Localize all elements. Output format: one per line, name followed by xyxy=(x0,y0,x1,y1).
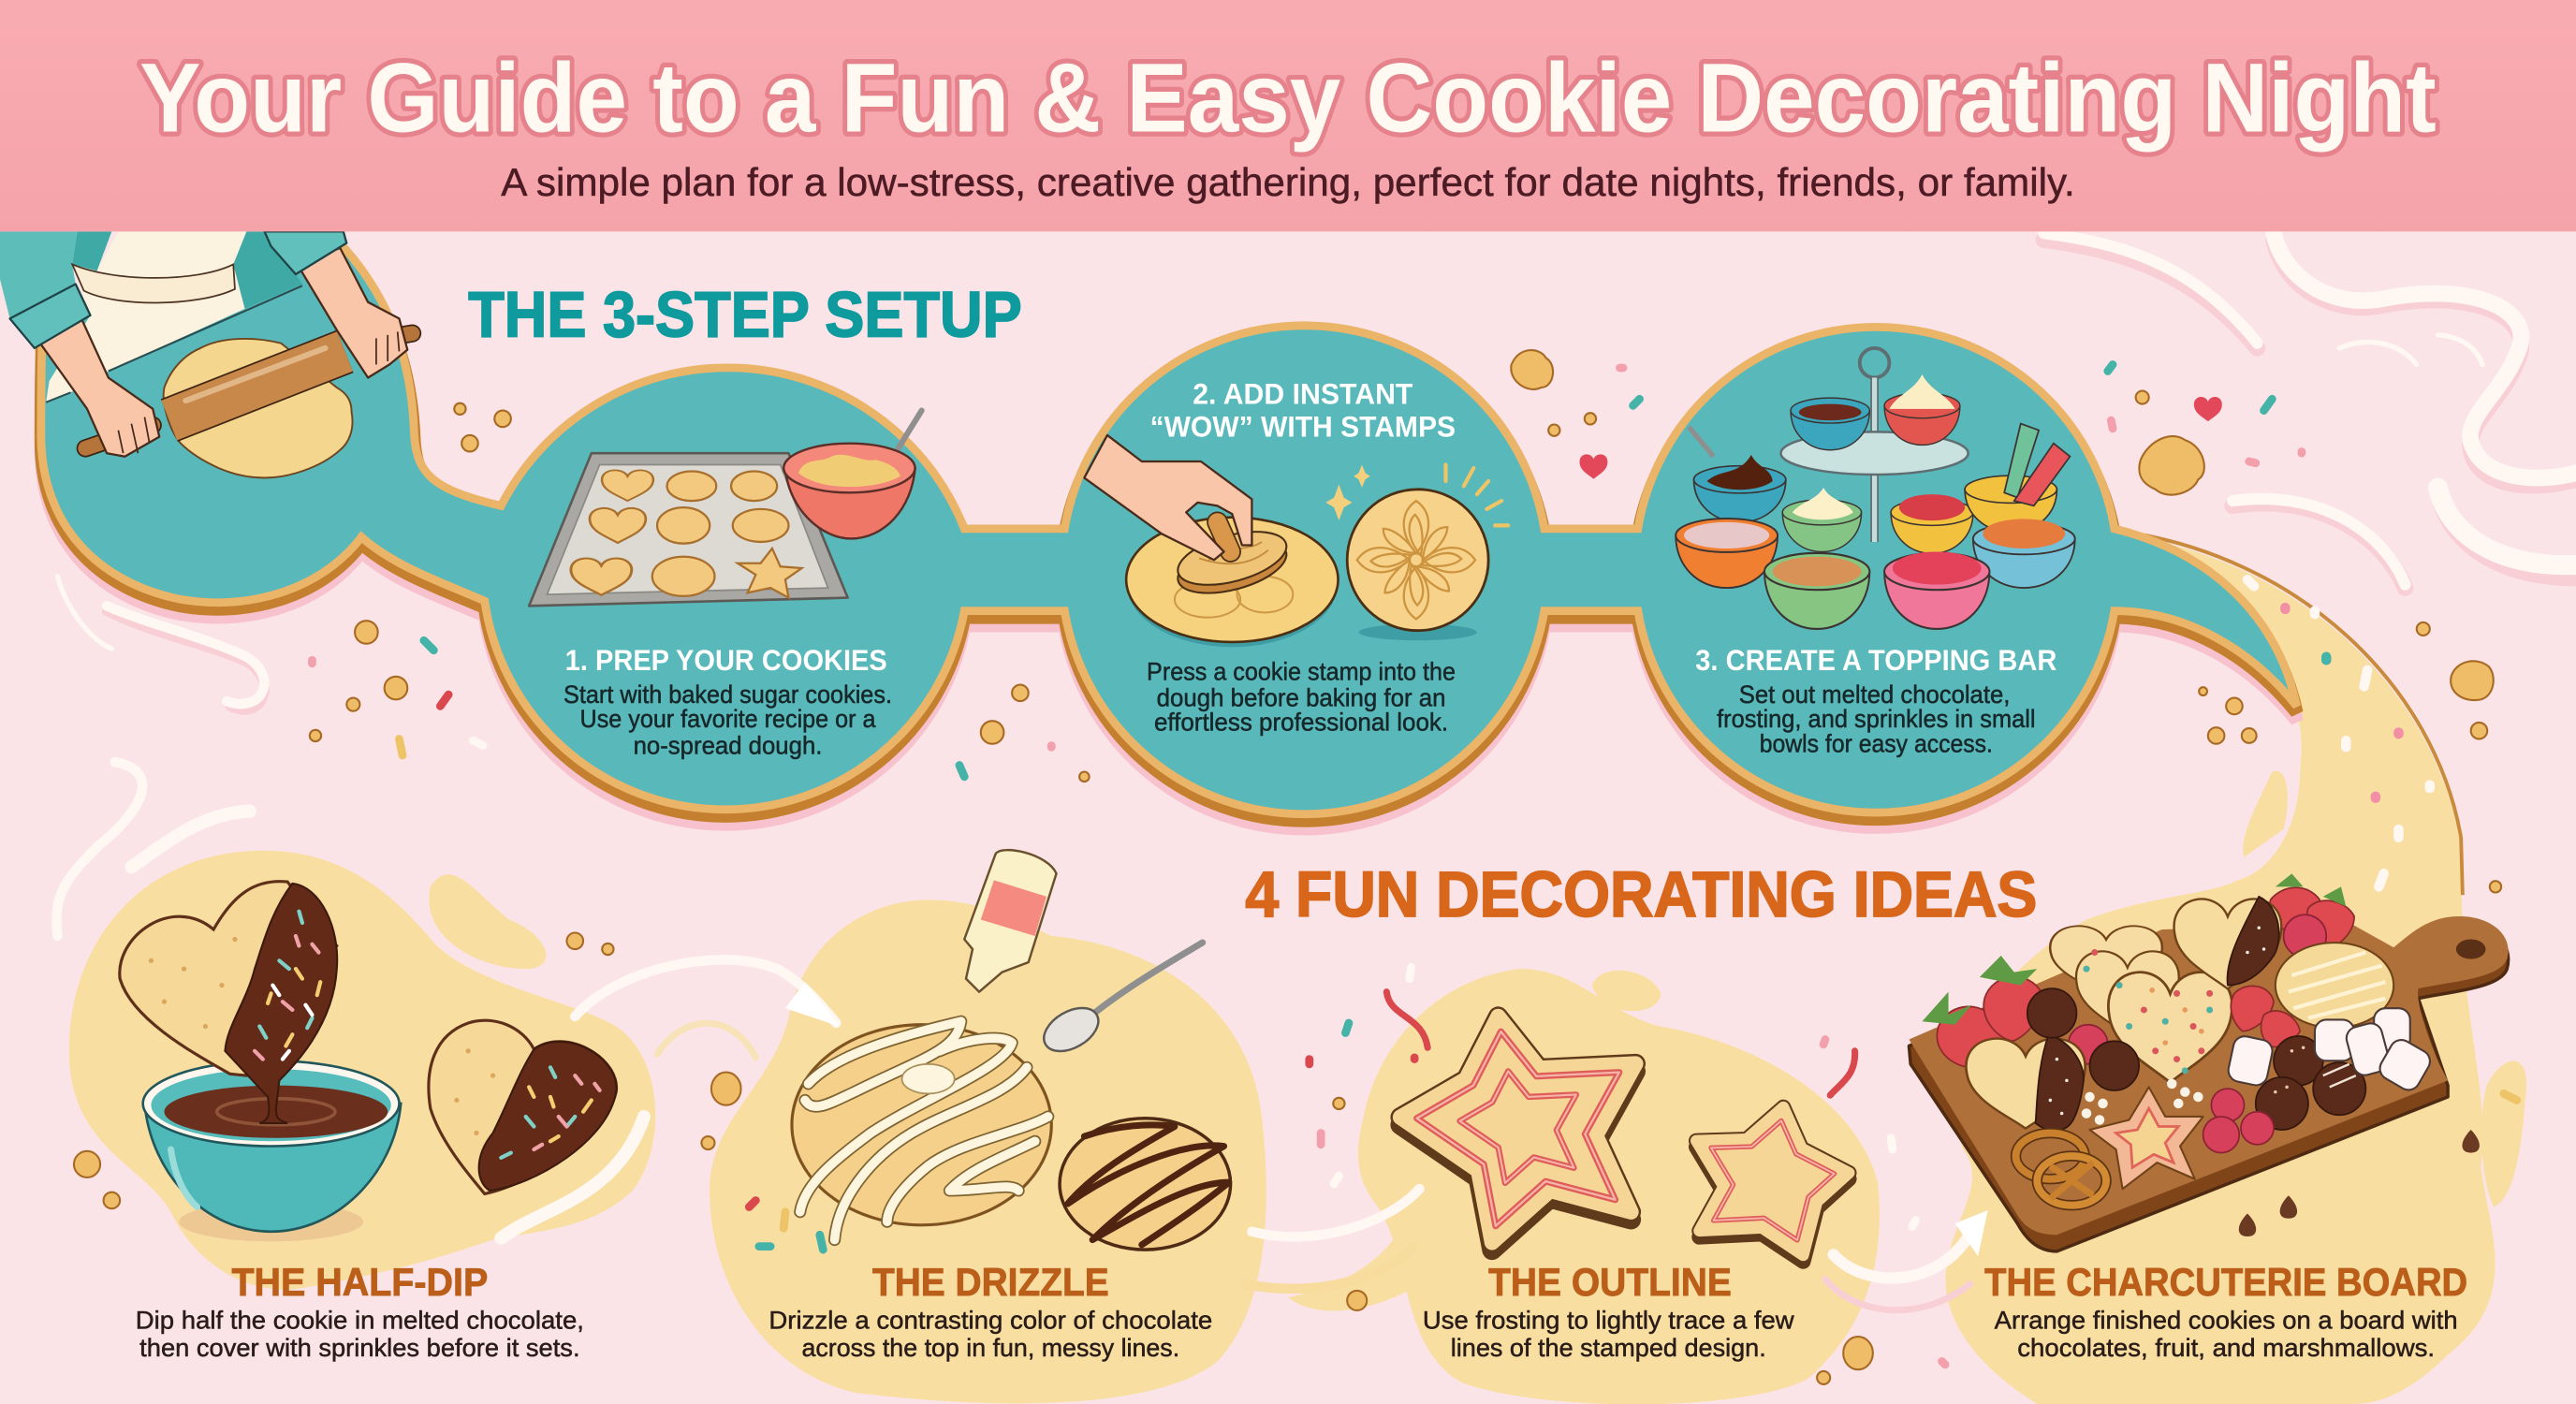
scattered crumbs xyxy=(74,350,2501,1384)
apron waist band xyxy=(72,264,235,302)
half-dipped hearts xyxy=(1966,897,2281,1131)
icon: sparkles xyxy=(1325,464,1508,525)
text: step 3: Set out melted chocolate, xyxy=(1739,680,2010,709)
white curved arrow: outline to charcuterie xyxy=(1825,1210,1988,1310)
panel: step 3 xyxy=(1676,348,2075,758)
right arm xyxy=(298,248,407,378)
subtitle: A simple plan for a low-stress, creative gathering, perfect for date nights, friends, or family. xyxy=(501,160,2075,204)
white curved arrow: drizzle to outline xyxy=(1245,1189,1419,1289)
text: outline: lines of the stamped design. xyxy=(1451,1333,1766,1362)
right sleeve xyxy=(265,231,346,274)
strawberries: small pair xyxy=(2231,986,2300,1047)
sprinkle heart cookies xyxy=(2050,926,2232,1082)
band shadow xyxy=(41,246,2297,829)
text: charcuterie: Arrange finished cookies on a board with xyxy=(1995,1305,2458,1334)
scattered sprinkles xyxy=(312,364,2517,1365)
raspberry xyxy=(2069,914,2326,1064)
stream sprinkles xyxy=(2247,579,2430,886)
heading: step 1: 1. PREP YOUR COOKIES xyxy=(565,643,887,677)
illustration: dipped heart cookie xyxy=(120,882,337,1123)
cream cookie stream xyxy=(1945,534,2496,1404)
header band xyxy=(0,0,2576,231)
left arm xyxy=(37,320,159,457)
heading: step 2: 2. ADD INSTANT xyxy=(1193,377,1412,411)
illustration: icing bottle xyxy=(964,850,1057,992)
heading: step 3: 3. CREATE A TOPPING BAR xyxy=(1695,643,2057,677)
marshmallows xyxy=(2226,1008,2434,1094)
illustration: small star cookie xyxy=(1696,1107,1849,1262)
chocolate chips xyxy=(2239,1130,2480,1236)
text: half-dip xyxy=(136,1305,584,1362)
cream tail into outline blob xyxy=(1288,971,1661,1310)
cream blob: half-dip xyxy=(69,851,655,1290)
text: drizzle xyxy=(768,1305,1212,1362)
text: step 3: bowls for easy access. xyxy=(1760,729,1993,758)
illustration: tiered stand xyxy=(1781,348,1969,542)
panel: the drizzle xyxy=(768,850,1231,1362)
illustration: rolling dough xyxy=(0,231,413,478)
text: outline xyxy=(1423,1305,1794,1362)
white icing drip by half-dip cookie xyxy=(501,1117,644,1238)
icons: hearts xyxy=(1579,397,2222,479)
heading: half-dip: THE HALF-DIP xyxy=(231,1260,488,1304)
text: step 3 xyxy=(1717,680,2036,758)
illustration: chocolate bowl xyxy=(143,1060,401,1241)
shirt side panels xyxy=(72,231,302,309)
tray cookies xyxy=(571,470,801,598)
shirt xyxy=(0,231,77,318)
sprinkles xyxy=(255,912,320,1060)
text: half-dip: Dip half the cookie in melted chocolate, xyxy=(136,1305,584,1334)
title: Your Guide to a Fun & Easy Cookie Decorating Night xyxy=(139,43,2437,153)
stream inner streak xyxy=(2243,771,2288,857)
illustration: dough and stamp xyxy=(1084,435,1339,647)
heading: 4 fun decorating ideas: 4 FUN DECORATING IDEAS xyxy=(1245,858,2037,930)
panel: the half-dip xyxy=(120,882,616,1362)
pretzels xyxy=(2016,1133,2106,1206)
dough xyxy=(164,339,353,478)
drizzled cookie xyxy=(2276,943,2393,1028)
heading: outline: THE OUTLINE xyxy=(1488,1260,1732,1304)
table edge xyxy=(46,285,302,402)
text: charcuterie: chocolates, fruit, and marshmallows. xyxy=(2017,1333,2435,1362)
illustration: topping bowls xyxy=(1676,374,2075,629)
illustration: dough bowl xyxy=(783,411,922,538)
cream blob: drizzle xyxy=(710,899,1266,1403)
panel: the outline xyxy=(1386,992,1855,1362)
text: step 1: Use your favorite recipe or a xyxy=(580,704,876,733)
icing swirls: left xyxy=(56,577,264,936)
star cookie xyxy=(2089,1087,2203,1189)
text: half-dip: then cover with sprinkles before it sets. xyxy=(139,1333,580,1362)
text: step 1 xyxy=(564,680,892,759)
heading: drizzle: THE DRIZZLE xyxy=(872,1260,1109,1304)
raspberries xyxy=(2203,1089,2274,1153)
text: step 2: effortless professional look. xyxy=(1154,708,1448,737)
panel: the charcuterie board xyxy=(1909,873,2509,1362)
illustration: wooden board xyxy=(1909,916,2509,1251)
illustration: white drizzle cookie xyxy=(792,1021,1051,1240)
right fingers xyxy=(376,331,399,364)
heading: step 2 xyxy=(1150,377,1456,444)
hand xyxy=(1084,435,1251,560)
text: step 2: dough before baking for an xyxy=(1157,682,1445,711)
stream outer edge xyxy=(2116,531,2463,895)
right side cream accent xyxy=(2481,1060,2526,1207)
text: step 1: no-spread dough. xyxy=(634,730,822,759)
left fingers xyxy=(118,417,150,453)
heading: the 3-step setup: THE 3-STEP SETUP xyxy=(468,279,1022,351)
panel: step 1 xyxy=(529,411,922,759)
icing squiggles xyxy=(1386,992,1855,1095)
rolling pin xyxy=(85,333,413,448)
apron xyxy=(46,231,246,402)
illustration: chocolate drizzle cookie xyxy=(1060,1119,1231,1250)
text: charcuterie xyxy=(1995,1305,2458,1362)
truffles xyxy=(2027,988,2365,1130)
left sleeve xyxy=(10,285,91,348)
band cookie edge (bottom lip) xyxy=(41,238,2297,821)
strawberries xyxy=(1922,873,2354,1067)
text: step 2 xyxy=(1147,656,1456,737)
text: step 3: frosting, and sprinkles in small xyxy=(1717,704,2036,733)
illustration: spoon xyxy=(1036,943,1203,1060)
text: drizzle: across the top in fun, messy lines. xyxy=(801,1333,1179,1362)
illustration: stamped cookie xyxy=(1347,490,1488,640)
panel: step 2 xyxy=(1084,377,1508,737)
cream blob: small accent near half-dip xyxy=(429,874,546,969)
heading: charcuterie: THE CHARCUTERIE BOARD xyxy=(1984,1260,2467,1304)
white curved arrow: half-dip to drizzle xyxy=(575,959,840,1058)
text: step 2: Press a cookie stamp into the xyxy=(1147,656,1456,685)
text: drizzle: Drizzle a contrasting color of chocolate xyxy=(768,1305,1212,1334)
text: outline: Use frosting to lightly trace a few xyxy=(1423,1305,1794,1334)
cream blob: outline xyxy=(1358,969,1880,1404)
text: step 1: Start with baked sugar cookies. xyxy=(564,680,892,709)
white chocolate bits xyxy=(2082,1079,2203,1125)
icing swirls: top right xyxy=(2043,233,2576,588)
heading: step 2: “WOW” WITH STAMPS xyxy=(1150,410,1456,444)
illustration: finished half-dip heart xyxy=(429,1020,616,1193)
teal step band xyxy=(41,231,2297,814)
illustration: baking tray xyxy=(529,453,848,606)
illustration: large star cookie xyxy=(1400,1016,1635,1250)
